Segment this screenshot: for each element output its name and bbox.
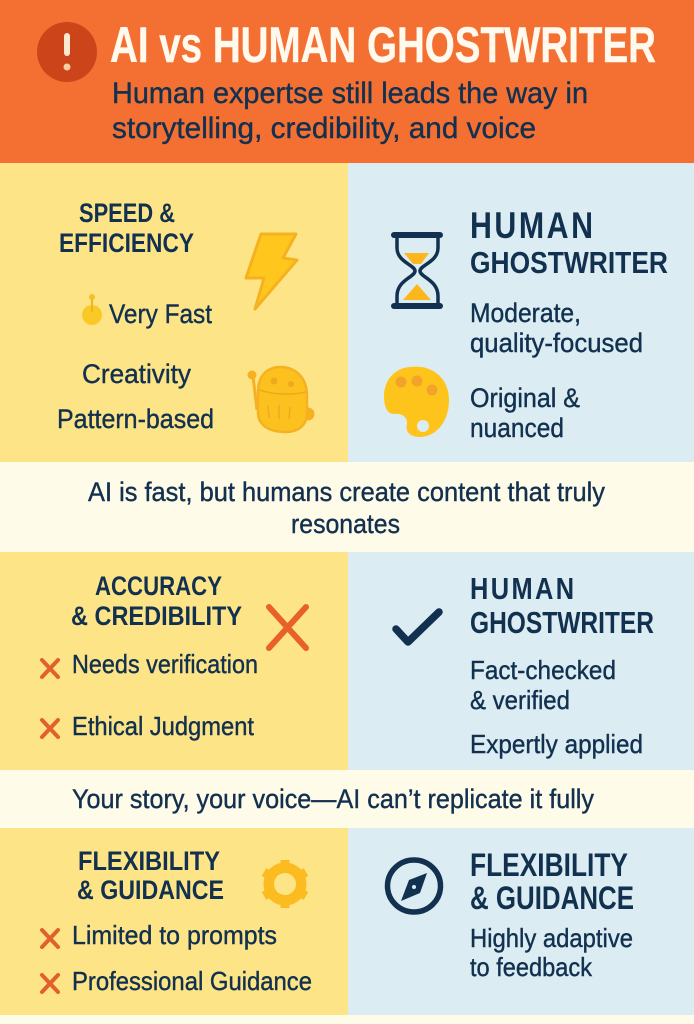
icon: cross — [42, 930, 58, 947]
icon: lightning bolt — [246, 234, 297, 309]
text: highly adaptive to feedback: Highly adaptive — [470, 923, 633, 953]
icon: compass — [388, 860, 440, 912]
icon: check mark — [396, 612, 439, 642]
icon: alert — [37, 22, 97, 82]
panel: AI flexibility and guidance — [0, 828, 348, 1015]
callout: your story: Your story, your voice—AI can’t replicate it fully — [72, 784, 594, 814]
icon: gear — [264, 860, 306, 908]
icon: cross — [42, 720, 58, 737]
callout: your story — [0, 770, 694, 828]
text: highly adaptive to feedback — [470, 923, 633, 982]
subtitle: Human expertse still leads the way in — [112, 77, 588, 110]
heading: human ghostwriter: HUMAN — [470, 205, 593, 247]
heading: speed and efficiency: EFFICIENCY — [59, 228, 194, 258]
text: professional guidance: Professional Guidance — [72, 966, 312, 996]
text: ethical judgment: Ethical Judgment — [72, 711, 255, 741]
text: moderate, quality-focused: Moderate, — [470, 298, 581, 328]
heading: human ghostwriter: HUMAN — [470, 572, 574, 607]
heading: accuracy and credibility — [71, 571, 242, 631]
icon: robot — [248, 367, 314, 432]
callout: AI is fast: resonates — [291, 509, 400, 539]
icon: hourglass — [391, 232, 443, 309]
heading: flexibility and guidance: & GUIDANCE — [77, 875, 224, 905]
subtitle — [112, 77, 588, 145]
panel: human accuracy and credibility — [348, 552, 694, 770]
panel: AI speed and creativity — [0, 163, 348, 462]
icon: cross — [42, 660, 58, 677]
heading: flexibility and guidance — [470, 847, 634, 916]
heading: flexibility and guidance — [77, 846, 224, 905]
text: needs verification: Needs verification — [72, 649, 258, 679]
callout: AI is fast: AI is fast, but humans create content that truly — [88, 477, 605, 507]
text: moderate, quality-focused — [470, 298, 643, 358]
heading: human ghostwriter — [470, 572, 654, 640]
text: very fast: Very Fast — [109, 299, 212, 329]
text: fact-checked and verified — [470, 655, 616, 715]
heading: flexibility and guidance: FLEXIBILITY — [78, 846, 220, 876]
heading: accuracy and credibility: ACCURACY — [95, 571, 222, 601]
icon: large cross — [269, 607, 306, 648]
callout: AI is fast — [0, 462, 694, 552]
heading: flexibility and guidance: FLEXIBILITY — [470, 847, 628, 883]
subtitle: storytelling, credibility, and voice — [112, 112, 536, 145]
heading: human ghostwriter — [470, 205, 668, 280]
text: expertly applied: Expertly applied — [470, 729, 643, 759]
panel: human speed and creativity — [348, 163, 694, 462]
header banner — [0, 0, 694, 163]
text: creativity: Creativity — [82, 359, 191, 389]
text: highly adaptive to feedback: to feedback — [470, 952, 593, 982]
text: limited to prompts: Limited to prompts — [72, 920, 277, 950]
icon: cross — [42, 975, 58, 992]
heading: speed and efficiency — [59, 198, 194, 258]
text: fact-checked and verified: & verified — [470, 685, 570, 715]
icon: small robot dot — [82, 294, 102, 325]
panel: AI accuracy and credibility — [0, 552, 348, 770]
icon: palette — [384, 367, 449, 437]
text: original and nuanced: Original & — [470, 383, 580, 413]
text: moderate, quality-focused: quality-focused — [470, 328, 643, 358]
heading: accuracy and credibility: & CREDIBILITY — [71, 601, 242, 631]
text: original and nuanced: nuanced — [470, 413, 564, 443]
heading: speed and efficiency: SPEED & — [79, 198, 175, 228]
text: original and nuanced — [470, 383, 580, 443]
panel: human flexibility and guidance — [348, 828, 694, 1015]
heading: flexibility and guidance: & GUIDANCE — [470, 880, 634, 916]
text: fact-checked and verified: Fact-checked — [470, 655, 616, 685]
text: pattern-based: Pattern-based — [57, 404, 214, 434]
